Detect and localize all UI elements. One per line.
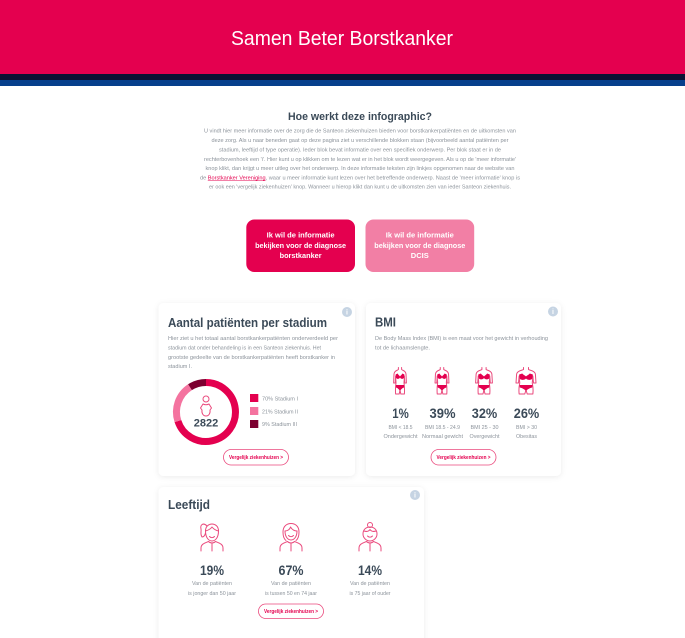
icon: info: i	[552, 309, 554, 316]
stat: obesitas: Obesitas	[516, 434, 538, 440]
stat: normaal gewicht: Normaal gewicht	[422, 434, 464, 440]
icon: patient	[200, 396, 212, 416]
button: diagnose DCIS: bekijken voor de diagnose	[374, 243, 465, 250]
icon: middle aged woman	[280, 524, 302, 551]
stat: obesitas	[514, 406, 539, 440]
panel description	[168, 336, 338, 370]
panel description: Hier ziet u het totaal aantal borstkankerpatiënten onderverdeeld per	[168, 336, 338, 342]
button: diagnose borstkanker	[246, 220, 355, 272]
intro text block: knop klikt, dan krijgt u meer uitleg over het onderwerp. In deze informatie teksten zijn linkjes opgenomen naar de website van	[206, 166, 515, 172]
icon: info: i	[346, 310, 348, 316]
stat: obesitas: BMI > 30	[516, 425, 537, 431]
button: diagnose borstkanker: Ik wil de informatie	[267, 232, 335, 240]
icon: young woman	[201, 524, 223, 551]
stat: tussen 50 en 74	[265, 563, 317, 597]
stat: 75 of ouder: is 75 jaar of ouder	[350, 591, 391, 597]
stat: normaal gewicht: BMI 18.5 - 24.9	[425, 425, 460, 431]
header banner	[0, 0, 685, 86]
icon: body obesitas	[516, 368, 536, 394]
button: vergelijk ziekenhuizen	[431, 450, 496, 465]
button: vergelijk ziekenhuizen: Vergelijk ziekenhuizen >	[436, 455, 491, 461]
stat: ondergewicht: Ondergewicht	[384, 434, 418, 440]
stat: jonger dan 50: Van de patiënten	[192, 581, 232, 587]
legend: 9% Stadium III	[262, 422, 297, 428]
stat: jonger dan 50: 19%	[200, 563, 224, 578]
button: diagnose borstkanker: borstkanker	[280, 253, 322, 260]
stat: 75 of ouder	[350, 563, 391, 597]
stat: jonger dan 50: is jonger dan 50 jaar	[188, 591, 236, 597]
intro text block: er ook een 'vergelijk ziekenhuizen' knop. Wanneer u hierop klikt dan kunt u de uitkomsten zien van ieder Santeon ziekenhuis.	[209, 184, 511, 190]
panel heading: Leeftijd	[168, 497, 210, 512]
legend	[250, 394, 298, 428]
donut chart	[176, 382, 235, 441]
button: vergelijk ziekenhuizen	[258, 604, 324, 618]
panel heading: Aantal patiënten per stadium	[168, 315, 327, 330]
stat: overgewicht	[470, 406, 500, 440]
stat: overgewicht: 32%	[472, 406, 497, 421]
stat: tussen 50 en 74: is tussen 50 en 74 jaar	[265, 591, 317, 597]
legend: 70% Stadium I	[262, 396, 298, 402]
stat: overgewicht: BMI 25 - 30	[470, 425, 499, 431]
legend: 21% Stadium II	[262, 410, 298, 416]
intro text block: stadium, leeftijd of type operatie). Ieder blok bevat informatie over een specifiek onderwerp. Per blok staat er in de	[219, 148, 501, 154]
button: vergelijk ziekenhuizen: Vergelijk ziekenhuizen >	[229, 455, 283, 461]
button: diagnose DCIS: Ik wil de informatie	[386, 232, 454, 240]
stat: ondergewicht	[384, 406, 418, 440]
button: diagnose borstkanker: bekijken voor de diagnose	[255, 243, 346, 250]
icon: older woman	[359, 522, 381, 551]
intro text block: U vindt hier meer informatie over de zorg die de Santeon ziekenhuizen bieden voor borstkankerpatiënten en de uitkomsten van	[204, 128, 516, 134]
intro text block: rechterbovenhoek een 'i'. Hier kunt u op klikken om te lezen wat er in het blok wordt weergegeven. Als u op de 'meer informatie'	[204, 157, 516, 163]
icon: body overgewicht	[476, 368, 492, 394]
icon: info	[342, 307, 352, 317]
stat: ondergewicht: BMI < 18.5	[388, 425, 413, 431]
donut total: 2822	[194, 418, 218, 430]
button: diagnose DCIS	[366, 220, 474, 272]
icon: body ondergewicht	[394, 368, 406, 394]
button: vergelijk ziekenhuizen	[224, 450, 288, 465]
icon: info: i	[414, 492, 416, 500]
panel description: grootste gedeelte van de borstkankerpatiënten heeft borstkanker in	[168, 355, 335, 361]
stat: tussen 50 en 74: 67%	[278, 563, 304, 578]
panel: aantal patiënten per stadium	[158, 303, 355, 476]
stat: 75 of ouder: Van de patiënten	[350, 581, 390, 587]
stat: normaal gewicht: 39%	[430, 406, 456, 421]
icon: body normaal gewicht	[435, 368, 449, 394]
stat: normaal gewicht	[422, 406, 464, 440]
intro text block	[200, 128, 521, 190]
panel: leeftijd	[158, 487, 424, 638]
panel: BMI	[366, 303, 561, 476]
icon: info	[410, 490, 420, 500]
panel description	[375, 336, 548, 351]
panel description: tot de lichaamslengte.	[375, 345, 430, 351]
intro text block: deze zorg. Als u naar beneden gaat op deze pagina ziet u verschillende blokken staan (bijvoorbeeld aantal patiënten per	[212, 138, 509, 144]
panel description: stadium I.	[168, 364, 192, 370]
stat: ondergewicht: 1%	[392, 406, 409, 421]
stat: 75 of ouder: 14%	[358, 563, 382, 578]
intro heading: Hoe werkt deze infographic?	[288, 111, 432, 123]
stat: overgewicht: Overgewicht	[470, 434, 500, 440]
button: diagnose DCIS: DCIS	[411, 253, 429, 260]
button: vergelijk ziekenhuizen: Vergelijk ziekenhuizen >	[264, 609, 318, 615]
title: Samen Beter Borstkanker	[231, 28, 453, 50]
stat: tussen 50 en 74: Van de patiënten	[271, 581, 311, 587]
stat: obesitas: 26%	[514, 406, 539, 421]
panel description: stadium dat onder behandeling is in een Santeon ziekenhuis. Het	[168, 345, 322, 351]
stat: jonger dan 50	[188, 563, 236, 597]
panel heading: BMI	[375, 314, 396, 330]
panel description: De Body Mass Index (BMI) is een maat voor het gewicht in verhouding	[375, 336, 548, 342]
icon: info	[548, 306, 558, 316]
intro text block: de Borstkanker Vereniging , waar u meer informatie kunt lezen over het betreffende onderwerp. Naast de 'meer informatie' knop is	[200, 176, 521, 182]
